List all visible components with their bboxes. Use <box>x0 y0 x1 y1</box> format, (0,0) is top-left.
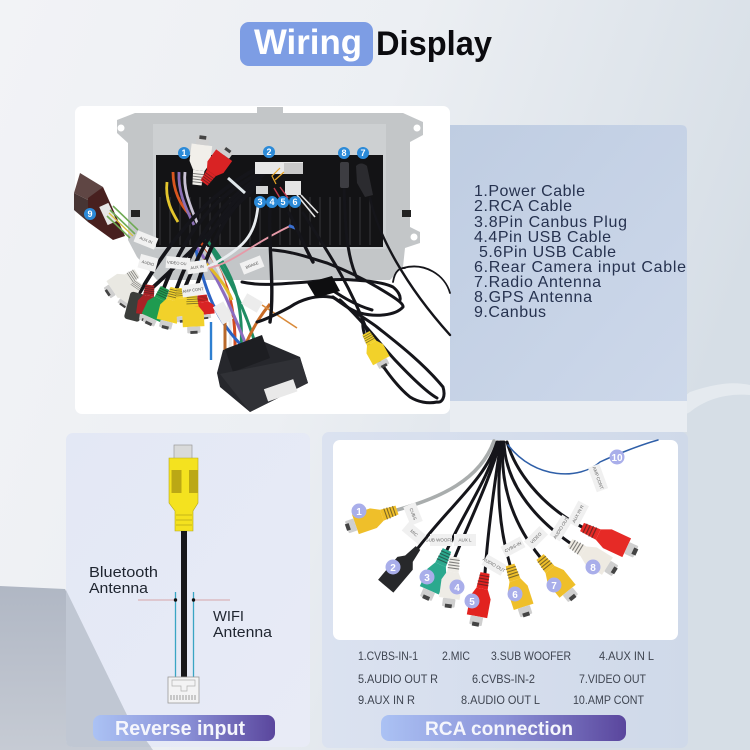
yellow plug <box>155 285 185 331</box>
right panel background <box>322 432 688 748</box>
RCA numbered markers: 3 <box>424 573 430 584</box>
white plug pair on top <box>187 134 213 186</box>
cable tags: AUX IN <box>190 264 204 270</box>
RCA legend: 3.SUB WOOFER <box>491 651 571 663</box>
title word: Wiring: Wiring <box>254 23 362 62</box>
RCA numbered markers: 5 <box>469 597 475 608</box>
connector block bottom <box>256 186 268 194</box>
cable tags: AMP CONT <box>182 286 204 294</box>
cable list text: 4.4Pin USB Cable <box>474 229 611 246</box>
RCA legend: 8.AUDIO OUT L <box>461 695 541 707</box>
cable tags: AUX L <box>458 538 472 542</box>
RCA legend: 5.AUDIO OUT R <box>358 674 438 686</box>
list panel background <box>450 125 687 401</box>
head unit numbered markers: 6 <box>292 197 298 207</box>
fan of RCA cables <box>397 440 658 573</box>
RCA plugs <box>343 500 641 628</box>
cable tags: AUDIO <box>141 259 155 267</box>
yellow plug <box>171 287 194 323</box>
USB plug <box>307 276 340 298</box>
cable list text: 7.Radio Antenna <box>474 274 601 291</box>
blue loose wire <box>210 322 212 360</box>
RCA legend: 1.CVBS-IN-1 <box>358 651 418 663</box>
RCA numbered markers: 2 <box>390 563 396 574</box>
cable tags: MIC <box>409 528 419 538</box>
label: Bluetooth Antenna <box>89 564 158 597</box>
RCA plugs on bundle <box>101 134 393 372</box>
plug 6 yellow <box>500 562 537 620</box>
RCA legend: 6.CVBS-IN-2 <box>472 674 535 686</box>
RCA legend: 9.AUX IN R <box>358 695 415 707</box>
cable list text: 1.Power Cable <box>474 183 585 200</box>
second white plug <box>114 276 147 312</box>
plug 5 red <box>465 571 495 628</box>
cable tags: CVBS <box>408 507 418 521</box>
strip under list panel <box>450 401 687 432</box>
head unit numbered markers <box>84 146 369 220</box>
red plug <box>192 294 215 320</box>
cable tags: VIDEO <box>529 531 543 545</box>
title <box>240 22 492 66</box>
cable list text: 2.RCA Cable <box>474 198 572 215</box>
RCA legend: 7.VIDEO OUT <box>579 674 646 686</box>
RCA legend: 2.MIC <box>442 651 470 663</box>
RCA legend: 4.AUX IN L <box>599 651 655 663</box>
head unit connectors <box>255 162 318 217</box>
plug 9 red <box>578 518 641 562</box>
pill: RCA connection: RCA connection <box>425 718 573 740</box>
left panel background <box>66 433 310 747</box>
background light band <box>640 383 750 432</box>
RCA numbered markers: 4 <box>454 583 460 594</box>
head unit numbered markers: 7 <box>360 148 366 158</box>
heatsink fins <box>160 197 370 245</box>
panel: reverse input <box>66 433 310 747</box>
head unit numbered markers: 1 <box>181 148 187 158</box>
cable list text: 6.Rear Camera input Cable <box>474 259 686 276</box>
RCA numbered markers: 1 <box>356 507 362 518</box>
cable tags: AUDIO OUT <box>552 516 570 540</box>
RCA numbered markers <box>352 450 624 608</box>
pill: Reverse input <box>93 715 275 741</box>
RCA numbered markers: 10 <box>611 453 623 464</box>
cable list text: 5.6Pin USB Cable <box>479 244 616 261</box>
cable tags: AMP CONT <box>592 466 604 490</box>
head unit numbered markers: 9 <box>87 209 93 219</box>
cable tags: SUB WOOFER <box>426 538 457 542</box>
plug 1 yellow <box>343 500 400 537</box>
yellow camera plug <box>358 328 393 372</box>
red plug <box>135 284 160 323</box>
yellow plug <box>181 294 205 334</box>
cable tags <box>402 464 608 577</box>
head unit numbered markers: 3 <box>257 197 263 207</box>
cable tags: AUDIO OUT <box>482 557 506 574</box>
label: WIFI Antenna: WIFI <box>213 608 244 625</box>
pointer lines <box>138 598 230 602</box>
cable list text: 3.8Pin Canbus Plug <box>474 214 627 231</box>
RCA legend: 10.AMP CONT <box>573 695 644 707</box>
head unit numbered markers: 4 <box>269 197 275 207</box>
cable list text <box>474 183 686 321</box>
plug 4 white <box>438 556 465 609</box>
tips of rear antenna plugs <box>340 162 373 197</box>
small colored pins <box>272 168 284 184</box>
plug 8 white <box>565 534 621 580</box>
head unit numbered markers: 5 <box>280 197 286 207</box>
head unit metal plate <box>117 107 423 280</box>
harness label <box>264 379 297 402</box>
pill: RCA connection <box>381 715 626 741</box>
plug 2 mic black <box>378 542 426 593</box>
RCA numbered markers: 6 <box>512 590 518 601</box>
cable tags: BRAKE <box>245 260 260 270</box>
cable list text: 8.GPS Antenna <box>474 289 592 306</box>
panel: head unit wiring photo <box>74 106 450 414</box>
panel: cable list <box>450 125 687 401</box>
GPS plug <box>340 162 349 188</box>
bottom harness connector <box>217 335 308 412</box>
title word: Display: Display <box>376 25 492 63</box>
RCA legend <box>358 651 655 707</box>
mounting holes <box>118 124 420 240</box>
red plug on top <box>196 143 237 189</box>
RJ style plug <box>168 677 199 703</box>
colored power wires <box>167 172 198 225</box>
wires to bottom connector <box>196 236 297 352</box>
mic plug <box>124 291 146 322</box>
label: Bluetooth Antenna: Antenna <box>89 580 149 597</box>
plate inner raised area <box>153 124 386 249</box>
white plug <box>101 264 143 302</box>
plug 3 green <box>416 546 456 604</box>
cable tags: AUX IN R <box>571 504 585 524</box>
yellow reverse connector <box>169 445 198 531</box>
canbus module <box>74 173 138 240</box>
photo white background <box>75 106 450 414</box>
radio plug <box>356 164 373 197</box>
corner shape seen through panel <box>66 590 151 747</box>
green plug <box>139 284 174 329</box>
label: Bluetooth Antenna: Bluetooth <box>89 564 158 581</box>
connector block top <box>255 162 303 174</box>
panel: RCA connection <box>322 432 688 748</box>
title pill <box>240 22 373 66</box>
cable tags <box>134 230 264 325</box>
label: WIFI Antenna <box>213 608 273 641</box>
RCA numbered markers: 7 <box>551 581 557 592</box>
cable tie <box>228 178 245 193</box>
coiled cables <box>242 250 444 403</box>
black rear heatsink <box>156 155 383 247</box>
cable tags: CVBS-IN <box>504 541 522 553</box>
cable list text: 9.Canbus <box>474 304 546 321</box>
RCA numbered markers: 8 <box>590 563 596 574</box>
plug 7 yellow <box>532 551 582 606</box>
antenna wires <box>176 592 194 677</box>
cables from ports <box>208 184 450 335</box>
RCA photo white background <box>333 440 678 640</box>
background corner shape <box>0 586 153 750</box>
pill: Reverse input: Reverse input <box>115 718 245 740</box>
label: WIFI Antenna: Antenna <box>213 624 273 641</box>
head unit numbered markers: 8 <box>341 148 347 158</box>
cable tags: AUX IN <box>139 235 153 245</box>
black cable bundle <box>140 168 268 295</box>
cable tags: VIDEO OUT <box>167 260 190 266</box>
head unit numbered markers: 2 <box>266 147 272 157</box>
black cable <box>181 531 187 677</box>
